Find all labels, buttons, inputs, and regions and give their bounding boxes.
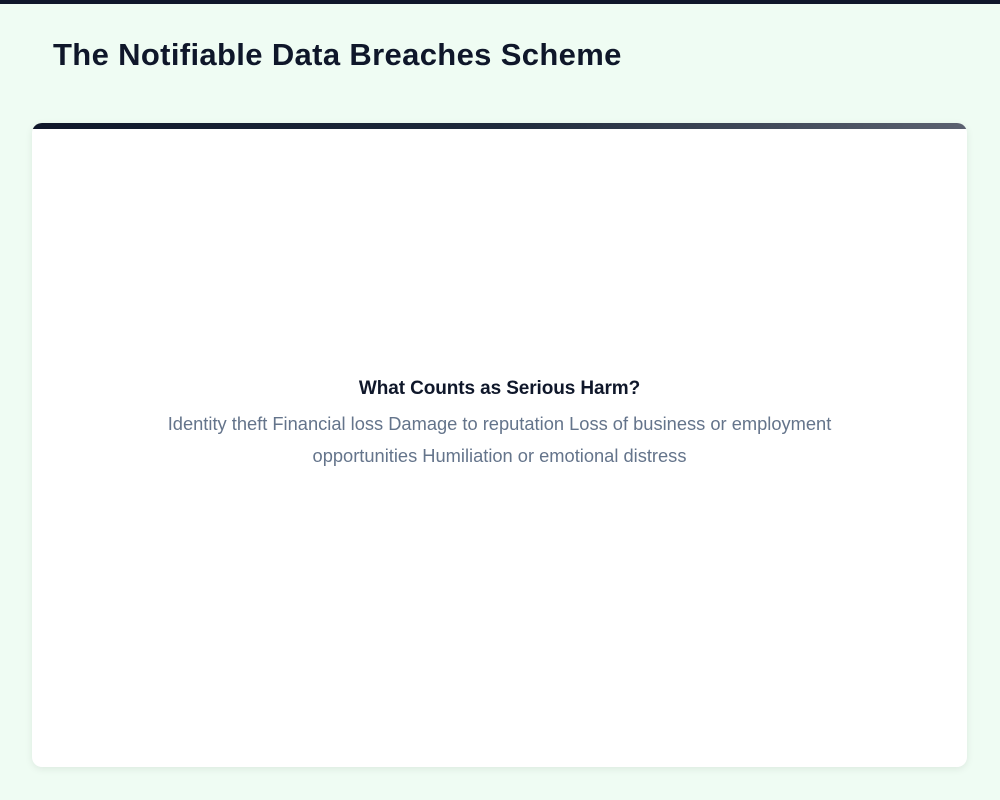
heading: what counts as serious harm: What Counts as Serious Harm? bbox=[359, 378, 640, 399]
title: The Notifiable Data Breaches Scheme bbox=[53, 37, 622, 72]
text: harm list: Identity theft Financial loss Damage to reputation Loss of business or employment opportunities Humiliation or emotional distress bbox=[168, 413, 831, 466]
text block: serious harm bbox=[168, 378, 832, 466]
panel: serious harm card bbox=[32, 123, 967, 767]
